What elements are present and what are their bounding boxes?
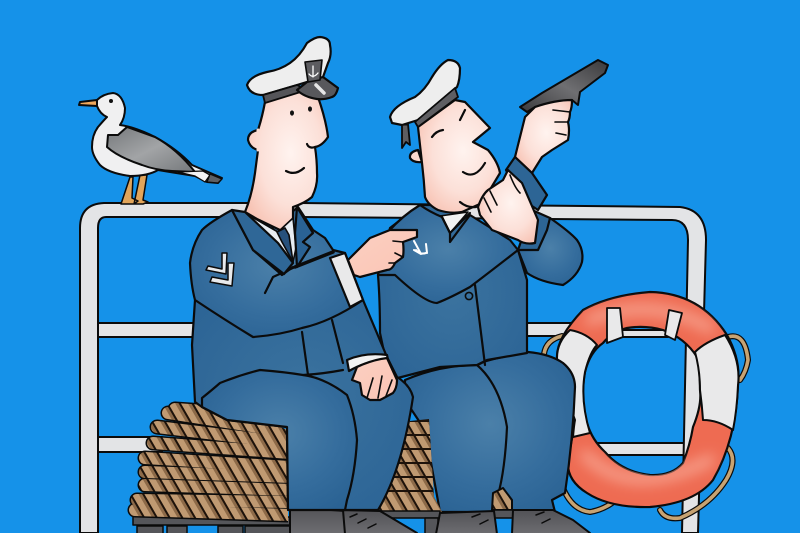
gull beak: [79, 100, 97, 106]
officer shirt: [245, 213, 296, 262]
officer lower body: [192, 290, 413, 510]
officer right lapel: [295, 207, 313, 267]
officer left lapel: [232, 210, 293, 274]
life ring: [544, 292, 748, 518]
small rope knot: [492, 488, 512, 510]
officer arm crease: [265, 252, 333, 293]
sailor arm sleeve: [518, 218, 582, 285]
sailor cap: [390, 60, 460, 125]
officer pointing hand: [348, 230, 417, 277]
gull wing: [107, 127, 195, 172]
sailor legs: [405, 352, 575, 512]
chevrons: [206, 253, 227, 274]
ring straps: [607, 308, 623, 343]
sailor lower cuff: [518, 210, 550, 250]
sailor anchor: [414, 241, 427, 254]
sailor raised cuff: [506, 157, 547, 210]
sailor ear: [410, 150, 422, 162]
main rail and posts: [80, 203, 706, 533]
officer thigh: [202, 370, 357, 510]
sailor with pistol: [378, 60, 608, 512]
officer resting hand: [352, 358, 397, 400]
ring ropes: [544, 336, 748, 518]
lower rails: [92, 323, 197, 337]
officer torso: [190, 207, 363, 337]
sailor raised hand: [515, 100, 572, 173]
sailor boots: [436, 511, 497, 533]
cap badge: [305, 60, 322, 82]
sailor front flap: [378, 205, 518, 303]
officer tie: [277, 228, 293, 262]
gull legs: [121, 175, 148, 204]
gull body: [92, 93, 222, 183]
sailor neck tab: [440, 212, 468, 233]
illustration: two sailors on a ship's rail: [78, 36, 751, 533]
boots: [290, 507, 590, 533]
ship railing: [80, 203, 706, 533]
seagull: [79, 93, 222, 204]
sailor lower hand: [478, 170, 538, 244]
officer: [190, 37, 417, 510]
ring body: [557, 292, 739, 507]
bench planks: [133, 510, 514, 533]
officer boots: [290, 507, 345, 533]
sailor head: [418, 100, 500, 213]
gull tail: [178, 171, 210, 182]
ring highlights: [585, 309, 710, 479]
pistol: [520, 60, 608, 112]
officer neck and head: [245, 90, 328, 230]
ring white sections: [557, 330, 597, 437]
rope coil right: [379, 419, 442, 512]
officer pointing cuff: [330, 253, 363, 307]
sailor centre seam: [475, 285, 485, 365]
rope coil left: [135, 409, 290, 515]
officer cap: [247, 37, 331, 95]
sailor torso: [378, 205, 527, 380]
officer resting cuff: [347, 354, 388, 371]
